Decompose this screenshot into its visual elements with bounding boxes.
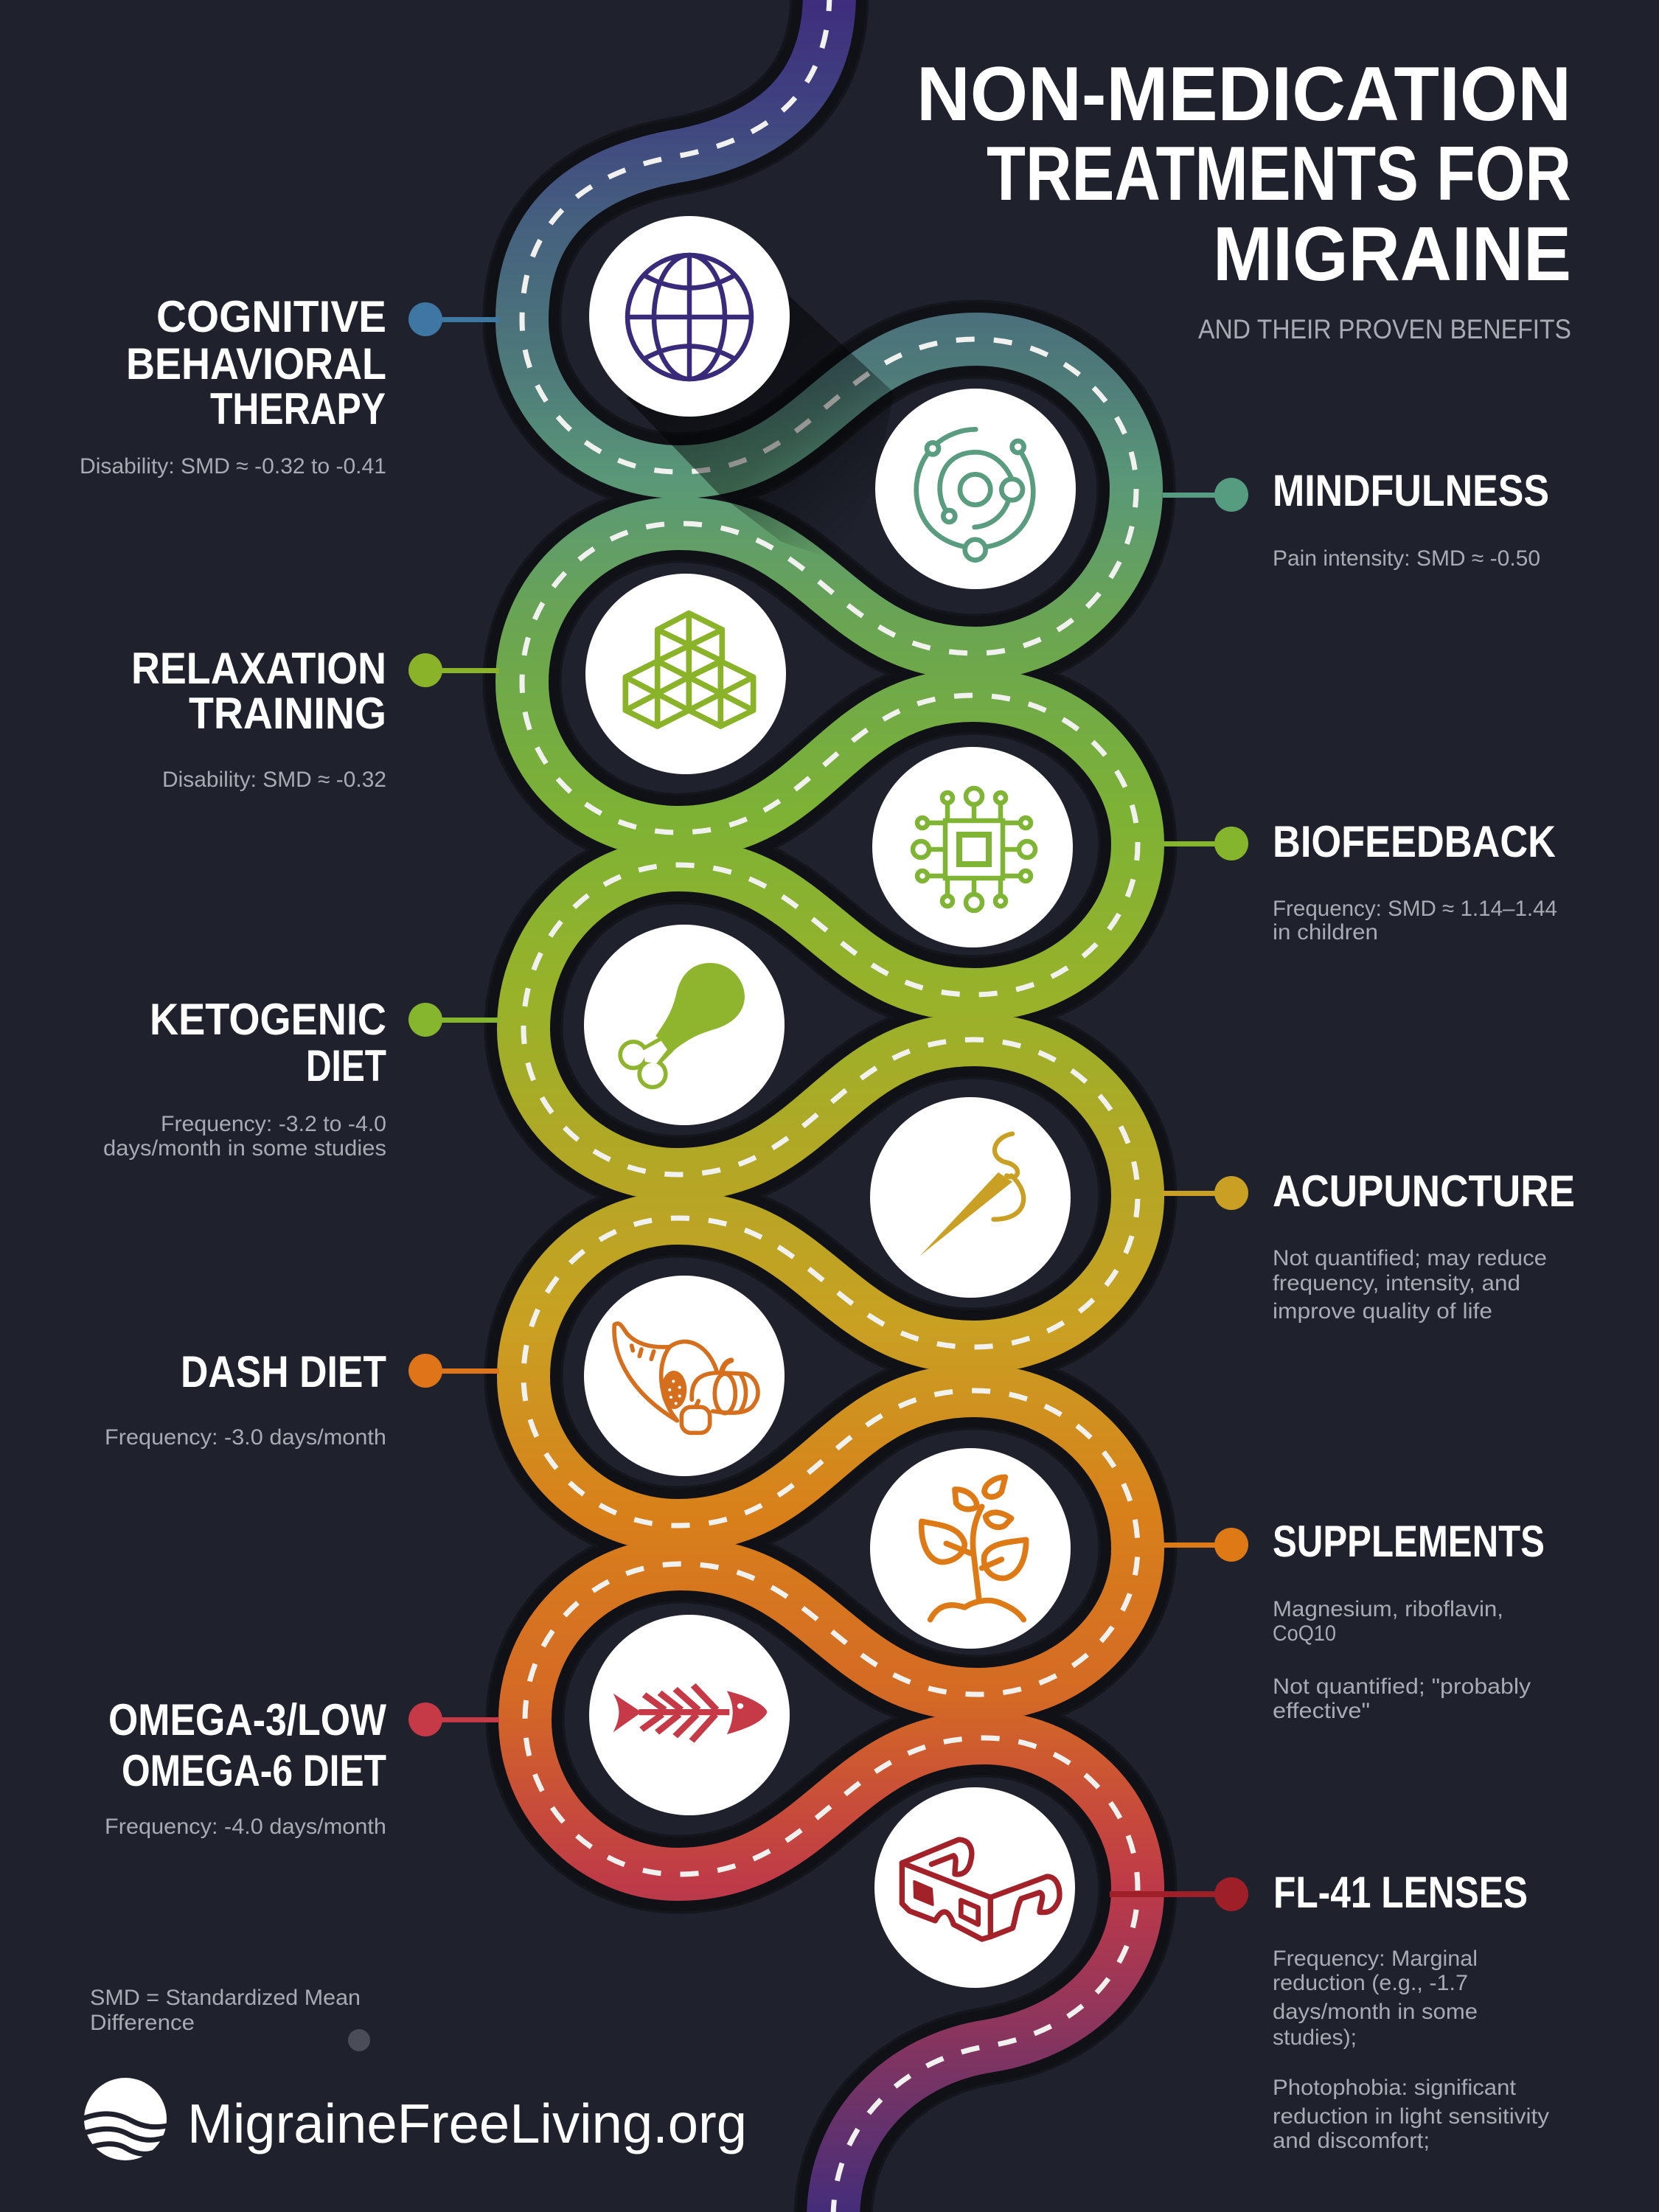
- title: NON-MEDICATION: [917, 52, 1571, 137]
- icon: globe: [589, 216, 790, 417]
- panel: relaxation training: [131, 644, 499, 792]
- icon: plant: [870, 1448, 1071, 1649]
- detail: [1273, 1246, 1547, 1324]
- panel: cognitive behavioral therapy: [80, 292, 499, 479]
- detail: CoQ10: [1273, 1621, 1336, 1646]
- heading: KETOGENIC: [150, 995, 386, 1044]
- heading: RELAXATION: [131, 644, 386, 693]
- detail: [1273, 897, 1557, 945]
- detail: Not quantified; may reduce: [1273, 1246, 1547, 1270]
- panel: supplements: [1163, 1517, 1545, 1723]
- heading: THERAPY: [210, 384, 386, 434]
- detail: Pain intensity: SMD ≈ -0.50: [1273, 546, 1540, 571]
- legend: SMD note: SMD = Standardized Mean: [90, 1986, 361, 2010]
- logo: [80, 2078, 747, 2160]
- connector dot: [408, 1003, 499, 1037]
- detail: effective": [1273, 1699, 1370, 1723]
- heading: ACUPUNCTURE: [1273, 1166, 1575, 1216]
- detail: improve quality of life: [1273, 1299, 1492, 1324]
- connector dot: [408, 1354, 499, 1388]
- detail: and discomfort;: [1273, 2129, 1430, 2153]
- detail: Frequency: -3.2 to -4.0: [161, 1112, 386, 1136]
- heading: [126, 292, 386, 434]
- heading: [131, 644, 386, 738]
- heading: FL-41 LENSES: [1273, 1868, 1528, 1917]
- heading: OMEGA-6 DIET: [122, 1746, 386, 1795]
- detail: days/month in some studies: [103, 1136, 386, 1161]
- detail: Magnesium, riboflavin,: [1273, 1597, 1503, 1621]
- heading: BEHAVIORAL: [126, 339, 386, 389]
- icon: 3d glasses: [874, 1787, 1075, 1988]
- panel: acupuncture: [1163, 1166, 1575, 1324]
- detail: [1273, 1597, 1531, 1723]
- heading: MINDFULNESS: [1273, 466, 1549, 515]
- connector dot: [1163, 827, 1248, 860]
- panel: dash diet: [105, 1347, 499, 1450]
- heading: [108, 1695, 386, 1795]
- detail: Not quantified; "probably: [1273, 1674, 1531, 1699]
- detail: days/month in some: [1273, 2000, 1478, 2024]
- detail: Disability: SMD ≈ -0.32: [162, 768, 386, 792]
- connector dot: [1163, 478, 1248, 512]
- icon: fish bone: [589, 1615, 790, 1815]
- icon: orbit: [875, 389, 1076, 589]
- connector dot: [1163, 1528, 1248, 1562]
- panel: mindfulness: [1163, 466, 1549, 571]
- detail: [103, 1112, 386, 1161]
- detail: [1273, 1947, 1549, 2153]
- heading: TRAINING: [189, 689, 386, 738]
- detail: Frequency: -3.0 days/month: [105, 1425, 386, 1450]
- subtitle: AND THEIR PROVEN BENEFITS: [1198, 314, 1571, 344]
- connector dot: [408, 302, 499, 336]
- connector dot: [1110, 1877, 1248, 1911]
- icon: cubes: [585, 574, 786, 774]
- connector dot: [408, 1703, 499, 1736]
- heading: BIOFEEDBACK: [1273, 817, 1556, 866]
- detail: Photophobia: significant: [1273, 2076, 1517, 2100]
- connector dot: [408, 653, 499, 687]
- icon: chicken leg: [584, 925, 785, 1125]
- detail: Disability: SMD ≈ -0.32 to -0.41: [80, 454, 386, 479]
- connector dot: [1163, 1176, 1248, 1210]
- detail: reduction in light sensitivity: [1273, 2104, 1549, 2129]
- icon: cornucopia: [584, 1276, 785, 1476]
- detail: Frequency: SMD ≈ 1.14–1.44: [1273, 897, 1557, 921]
- heading: DIET: [306, 1041, 386, 1091]
- title: [917, 52, 1571, 297]
- icon: needle and thread: [870, 1097, 1071, 1298]
- panel: ketogenic diet: [103, 995, 499, 1161]
- winding road: [522, 0, 1138, 2212]
- heading: DASH DIET: [181, 1347, 386, 1397]
- heading: SUPPLEMENTS: [1273, 1517, 1545, 1566]
- legend: SMD note: [90, 1986, 361, 2035]
- panel: biofeedback: [1163, 817, 1557, 945]
- detail: reduction (e.g., -1.7: [1273, 1971, 1468, 1995]
- legend: SMD note: Difference: [90, 2011, 195, 2035]
- detail: Frequency: Marginal: [1273, 1947, 1478, 1971]
- website name: MigraineFreeLiving.org: [187, 2093, 747, 2154]
- heading: COGNITIVE: [156, 292, 386, 341]
- detail: frequency, intensity, and: [1273, 1271, 1520, 1295]
- detail: in children: [1273, 920, 1378, 945]
- long shadow from globe circle: [627, 289, 894, 560]
- panel: omega-3 diet: [105, 1695, 499, 1839]
- detail: studies);: [1273, 2025, 1357, 2050]
- icon: chip: [872, 747, 1073, 947]
- title: MIGRAINE: [1213, 212, 1571, 297]
- decorative grey dot: [348, 2029, 370, 2051]
- heading: [150, 995, 386, 1091]
- panel: fl-41 lenses: [1110, 1868, 1549, 2153]
- icon: logo waves: [80, 2078, 171, 2160]
- detail: Frequency: -4.0 days/month: [105, 1815, 386, 1839]
- heading: OMEGA-3/LOW: [108, 1695, 386, 1745]
